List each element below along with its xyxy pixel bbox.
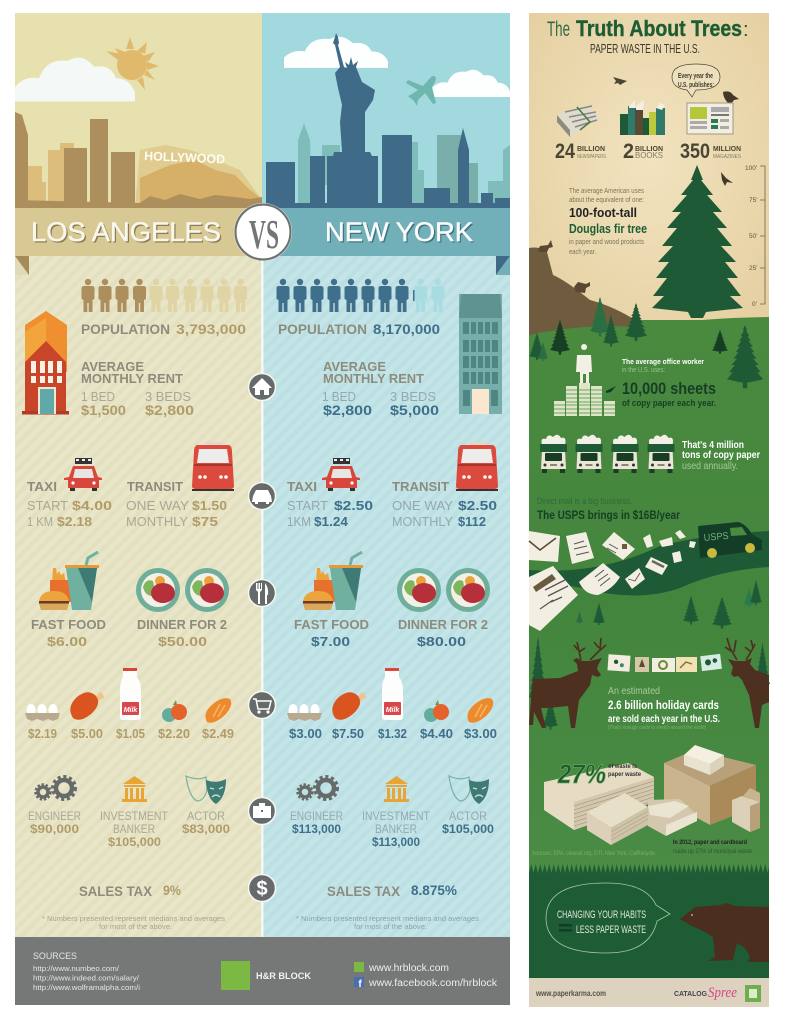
VS badge: [234, 203, 292, 261]
transport text: Los Angeles: MONTHLY: [126, 514, 188, 529]
transport text: New York: TAXI: [287, 479, 317, 494]
rent text: New York: 3 BEDS: [390, 389, 436, 404]
transport text: New York: MONTHLY: [392, 514, 453, 529]
icon: paper plane: [613, 77, 627, 85]
icon: cloud over New York left: [284, 37, 388, 68]
food text: New York: $80.00: [417, 634, 466, 649]
icon: office worker on paper stacks: [554, 344, 615, 416]
grocery prices: Los Angeles: $2.19: [28, 727, 57, 741]
PaperKarma logo: [745, 985, 761, 1002]
population text: New York: 8,170,000: [373, 322, 440, 337]
job text: Los Angeles: $105,000: [108, 835, 161, 849]
Hollywood sign: HOLLYWOOD: [144, 149, 225, 167]
New York header background: [262, 13, 510, 208]
copy paper text: tons of copy paper: [682, 449, 760, 461]
icon: open box: [648, 799, 697, 836]
rent text: New York: $2,800: [323, 403, 372, 418]
tree height scale: 75': [749, 197, 757, 204]
job text: New York: $105,000: [442, 822, 494, 836]
grocery prices: New York: [289, 727, 497, 741]
icon: New York tower: [459, 294, 502, 414]
rent text: New York: MONTHLY RENT: [323, 372, 424, 386]
office worker text: of copy paper each year.: [622, 398, 716, 409]
copy paper text: used annually.: [682, 461, 738, 472]
population text: Los Angeles: 3,793,000: [176, 322, 246, 337]
icon: cloud over New York right: [432, 70, 510, 97]
job text: New York: $113,000: [372, 835, 420, 849]
icon: bird on magazine: [723, 91, 739, 103]
population text: New York: POPULATION: [278, 322, 367, 337]
panel: Los Angeles vs New York infographic: [15, 13, 510, 1005]
icon: left deer: [529, 638, 606, 728]
population text: New York: [278, 322, 440, 337]
grocery prices: Los Angeles: $2.20: [158, 727, 190, 741]
transport text: Los Angeles: ONE WAY: [126, 498, 189, 513]
fir tree text: in paper and wood products: [569, 239, 644, 246]
icon: cloud over Los Angeles: [15, 58, 135, 102]
stat: 24 billion newspapers: NEWSPAPERS: [577, 154, 606, 160]
dark forest floor with grass edge: [529, 864, 769, 978]
sales tax: New York: 8.875%: [411, 883, 457, 898]
icon: big paper stack: [544, 763, 654, 830]
job text: Los Angeles: BANKER: [113, 822, 155, 836]
food text: Los Angeles: $50.00: [158, 634, 207, 649]
transport text: Los Angeles: TAXI: [27, 479, 57, 494]
icon: fast food New York: [303, 552, 363, 610]
Catalog Spree logo: [674, 985, 737, 1001]
category icon: dollar: [248, 874, 276, 902]
grocery prices: Los Angeles: $1.05: [116, 727, 145, 741]
paper and cardboard text: In 2012, paper and cardboard: [673, 839, 747, 846]
population pictogram: New York: [276, 279, 444, 312]
office worker text: The average office worker: [622, 357, 704, 366]
transport text: New York: 1KM: [287, 514, 311, 529]
icon: dinner plates Los Angeles: [136, 568, 229, 612]
icon: bus New York: [456, 442, 498, 491]
fir tree text: The average American uses: [569, 188, 644, 195]
title: Truth About Trees: [576, 16, 742, 41]
job text: New York: $113,000: [292, 822, 341, 836]
callout: every year the U.S. publishes: Every year the: [678, 73, 713, 80]
food text: New York: $7.00: [311, 634, 350, 649]
icon: Statue of Liberty: [327, 33, 378, 208]
tree height scale: 100': [745, 165, 757, 172]
sources text: http://www.numbeo.com/: [33, 964, 120, 973]
transport text: Los Angeles: $2.18: [57, 514, 92, 529]
27 percent callout: paper waste: [608, 771, 641, 778]
green meadow background: [529, 320, 769, 880]
transport text: Los Angeles: START: [27, 498, 68, 513]
rent text: New York: 1 BED: [322, 389, 356, 404]
website link: www.hrblock.com: [368, 963, 449, 974]
icon: small paper stack: [587, 793, 648, 845]
icon: fast food Los Angeles: [39, 552, 99, 610]
direct mail text: Direct mail is a big business.: [537, 496, 632, 507]
rent text: Los Angeles: [81, 360, 194, 418]
food text: Los Angeles: DINNER FOR 2: [137, 617, 227, 632]
sources text: [33, 951, 140, 992]
title: :: [743, 19, 749, 41]
job text: New York: INVESTMENT: [362, 809, 431, 823]
fir tree text: Douglas fir tree: [569, 221, 647, 236]
sales tax: New York: SALES TAX: [327, 884, 400, 899]
rent text: Los Angeles: MONTHLY RENT: [81, 372, 183, 386]
H&R Block logo: H&R BLOCK: [256, 971, 312, 981]
sales tax: Los Angeles: SALES TAX: [79, 884, 152, 899]
Los Angeles header background: [15, 13, 262, 208]
icon: taxi Los Angeles: [64, 458, 102, 491]
brown hill: [529, 248, 650, 340]
icon: big cardboard box: [664, 745, 756, 825]
grocery icons: New York: [287, 668, 493, 723]
rent text: New York: [322, 360, 439, 418]
stat: 24 billion newspapers: 24: [555, 140, 575, 163]
holiday cards text: [608, 686, 720, 731]
sources text: http://www.wolframalpha.com/i: [33, 983, 140, 992]
icon: USPS truck: USPS: [703, 531, 729, 544]
food text: New York: [294, 617, 488, 649]
rent text: Los Angeles: $1,500: [81, 403, 126, 418]
VS badge: VS: [249, 211, 279, 257]
job icons: New York: [298, 776, 489, 804]
subtitle: PAPER WASTE IN THE U.S.: [590, 41, 700, 56]
tree height scale: 0': [752, 301, 757, 308]
grocery prices: New York: $1.32: [378, 727, 407, 741]
icon: newspapers: [557, 105, 600, 137]
sources text: Sources: EPA, clearair.org, DTI, New York, CalRecycle: [532, 851, 656, 857]
banner: Los Angeles: [15, 208, 262, 256]
title: The: [547, 18, 570, 41]
stat: 2 billion books: 2: [623, 140, 634, 163]
ribbon fold right: [496, 256, 510, 275]
stat: 2 billion books: BOOKS: [635, 151, 663, 160]
category icon: briefcase: [248, 798, 276, 824]
icon: books: [620, 100, 665, 135]
fir tree text: [569, 188, 647, 256]
icon: mountain goats: [538, 240, 590, 293]
panel: Los Angeles content background: [15, 256, 262, 937]
footer: sources and H&R Block: [15, 937, 510, 1005]
icon: sun: [106, 37, 159, 90]
job text: Los Angeles: [28, 809, 230, 849]
job text: Los Angeles: INVESTMENT: [100, 809, 169, 823]
direct mail text: The USPS brings in $16B/year: [537, 508, 680, 522]
transport text: New York: ONE WAY: [392, 498, 453, 513]
footnote: Los Angeles: for most of the above.: [99, 922, 172, 931]
fir tree text: each year.: [569, 249, 596, 256]
27 percent callout: [557, 759, 641, 789]
job text: New York: BANKER: [375, 822, 417, 836]
holiday cards text: An estimated: [608, 686, 660, 697]
paper and cardboard text: made up 27% of municipal waste: [673, 848, 752, 855]
category icon: fork and knife: [248, 580, 276, 606]
footnote: Los Angeles: [42, 914, 225, 931]
food text: Los Angeles: $6.00: [47, 634, 87, 649]
population pictogram: Los Angeles: [82, 279, 247, 312]
holiday cards text: are sold each year in the U.S.: [608, 714, 720, 725]
banner: New York: [262, 208, 510, 256]
stat: 24 billion newspapers: BILLION: [577, 144, 605, 153]
transport text: New York: $112: [458, 514, 486, 529]
job text: New York: ACTOR: [449, 809, 487, 823]
transport text: Los Angeles: 1 KM: [27, 514, 53, 529]
icon: Douglas fir tree: [652, 165, 743, 318]
job text: Los Angeles: ACTOR: [187, 809, 225, 823]
rent text: New York: $5,000: [390, 403, 439, 418]
population text: Los Angeles: [81, 322, 246, 337]
grocery icons: Los Angeles: [25, 668, 231, 723]
transport text: New York: $1.24: [314, 514, 349, 529]
transport text: Los Angeles: $1.50: [192, 498, 227, 513]
H&R Block logo: [221, 961, 312, 990]
office worker text: in the U.S. uses:: [622, 367, 665, 374]
callout: every year the U.S. publishes: [672, 64, 720, 97]
facebook link: www.facebook.com/hrblock: [368, 978, 498, 989]
job text: Los Angeles: $90,000: [30, 822, 79, 836]
heading: New York: NEW YORK: [326, 218, 474, 248]
stat: 24 billion newspapers: [555, 140, 606, 163]
tree height scale: 25': [749, 265, 757, 272]
icon: magazine: [687, 103, 733, 134]
icon: paper dumpsters: [540, 435, 674, 473]
footnote: Los Angeles: * Numbers presented represent medians and averages: [42, 914, 225, 923]
job text: Los Angeles: $83,000: [182, 822, 230, 836]
transport text: New York: [287, 479, 497, 529]
job text: Los Angeles: ENGINEER: [28, 809, 81, 823]
fir tree text: 100-foot-tall: [569, 205, 637, 220]
stat: 350 million magazines: MILLION: [713, 144, 741, 153]
sources text: http://www.indeed.com/salary/: [33, 974, 140, 982]
grocery prices: New York: $3.00: [464, 727, 497, 741]
job text: New York: [290, 809, 494, 849]
icon: airplane: [406, 76, 436, 106]
icon: Los Angeles apartment: [22, 311, 69, 414]
callout: changing your habits: CHANGING YOUR HABITS: [557, 909, 646, 921]
icon: small box: [732, 788, 760, 832]
grocery prices: Los Angeles: $2.49: [202, 727, 234, 741]
rent text: Los Angeles: 3 BEDS: [145, 389, 191, 404]
grocery prices: Los Angeles: [28, 727, 234, 741]
icon: right deer: [725, 638, 769, 728]
grocery prices: New York: $4.40: [420, 727, 453, 741]
office worker text: 10,000 sheets: [622, 379, 716, 398]
heading: Los Angeles: LOS ANGELES: [31, 217, 221, 247]
category icon: car: [248, 482, 276, 510]
panel: New York content background: [262, 256, 510, 937]
Catalog Spree logo: Spree: [708, 985, 737, 1001]
category icon: dollar: $: [256, 878, 268, 900]
icon: flying mail pieces: [529, 530, 696, 631]
rent text: Los Angeles: 1 BED: [81, 389, 115, 404]
food text: New York: FAST FOOD: [294, 617, 369, 632]
population text: Los Angeles: POPULATION: [81, 322, 170, 337]
category icon: shopping cart: [248, 692, 276, 718]
category icon: home: [248, 374, 276, 400]
arrow to stack: [606, 386, 616, 393]
callout: changing your habits: [546, 883, 670, 953]
rent text: Los Angeles: AVERAGE: [81, 360, 144, 374]
transport text: Los Angeles: $75: [192, 514, 218, 529]
job icons: Los Angeles: [36, 776, 226, 804]
stat: 2 billion books: [623, 140, 663, 163]
footnote: New York: * Numbers presented represent medians and averages: [296, 914, 479, 923]
New York skyline: [266, 33, 510, 208]
copy paper text: That's 4 million: [682, 439, 744, 451]
sales tax: New York: [327, 883, 457, 899]
stat: 350 million magazines: MAGAZINES: [713, 154, 741, 160]
transport text: Los Angeles: [27, 479, 227, 529]
paper background: [529, 13, 769, 333]
icon: bus Los Angeles: [192, 442, 234, 491]
stat: 350 million magazines: [680, 140, 741, 163]
footnote: New York: [296, 914, 479, 931]
rent text: New York: AVERAGE: [323, 360, 386, 374]
transport text: New York: TRANSIT: [392, 479, 449, 494]
icon: taxi New York: [322, 458, 360, 491]
food text: Los Angeles: [31, 617, 227, 649]
holiday card bunting: [607, 654, 722, 672]
holiday cards text: 2.6 billion holiday cards: [608, 698, 719, 712]
stat: 350 million magazines: 350: [680, 140, 710, 163]
Catalog Spree logo: CATALOG: [674, 989, 707, 998]
food text: New York: DINNER FOR 2: [398, 617, 488, 632]
panel: The Truth About Trees infographic: [529, 13, 770, 1007]
callout: changing your habits: LESS PAPER WASTE: [576, 924, 646, 936]
transport text: Los Angeles: TRANSIT: [127, 479, 183, 494]
icon: USPS truck: [698, 522, 762, 558]
heading: Los Angeles: LOS ANGELES: [32, 218, 222, 248]
website: www.paperkarma.com: [535, 989, 606, 998]
footer band: [529, 978, 769, 1007]
transport text: New York: $2.50: [458, 498, 497, 513]
callout: every year the U.S. publishes: U.S. publishes:: [678, 82, 714, 89]
icon: dinner plates New York: [397, 568, 490, 612]
food text: Los Angeles: FAST FOOD: [31, 617, 106, 632]
27 percent callout: of waste is: [608, 763, 637, 770]
green ground edge: [529, 317, 769, 345]
grocery prices: Los Angeles: $5.00: [71, 727, 103, 741]
tree height scale: [745, 165, 765, 308]
fir tree text: about the equivalent of one:: [569, 197, 644, 204]
paper and cardboard text: [673, 839, 752, 855]
sales tax: Los Angeles: 9%: [163, 883, 181, 898]
transport text: New York: $2.50: [334, 498, 373, 513]
sales tax: Los Angeles: [79, 883, 181, 899]
footnote: New York: for most of the above.: [354, 922, 427, 931]
tree height scale: 50': [749, 233, 757, 240]
facebook link: f: [358, 979, 362, 990]
Los Angeles skyline: [15, 112, 262, 208]
copy paper text: [682, 439, 760, 472]
heading: New York: NEW YORK: [325, 217, 473, 247]
job text: New York: ENGINEER: [290, 809, 343, 823]
office worker text: [622, 357, 716, 409]
holiday cards text: (That's enough cards to stretch around the world): [608, 725, 706, 731]
27 percent callout: 27%: [557, 759, 606, 789]
icon: eagle: [721, 172, 733, 186]
rent text: Los Angeles: $2,800: [145, 403, 194, 418]
direct mail text: [537, 496, 680, 522]
transport text: Los Angeles: $4.00: [72, 498, 112, 513]
stat: 2 billion books: BILLION: [635, 144, 663, 153]
meadow fir trees: [529, 297, 770, 730]
sources text: SOURCES: [33, 951, 77, 962]
grocery prices: New York: $3.00: [289, 727, 322, 741]
ribbon fold left: [15, 256, 29, 275]
transport text: New York: START: [287, 498, 328, 513]
grocery prices: New York: $7.50: [332, 727, 364, 741]
road band: [529, 531, 769, 596]
icon: bear: [680, 903, 769, 962]
